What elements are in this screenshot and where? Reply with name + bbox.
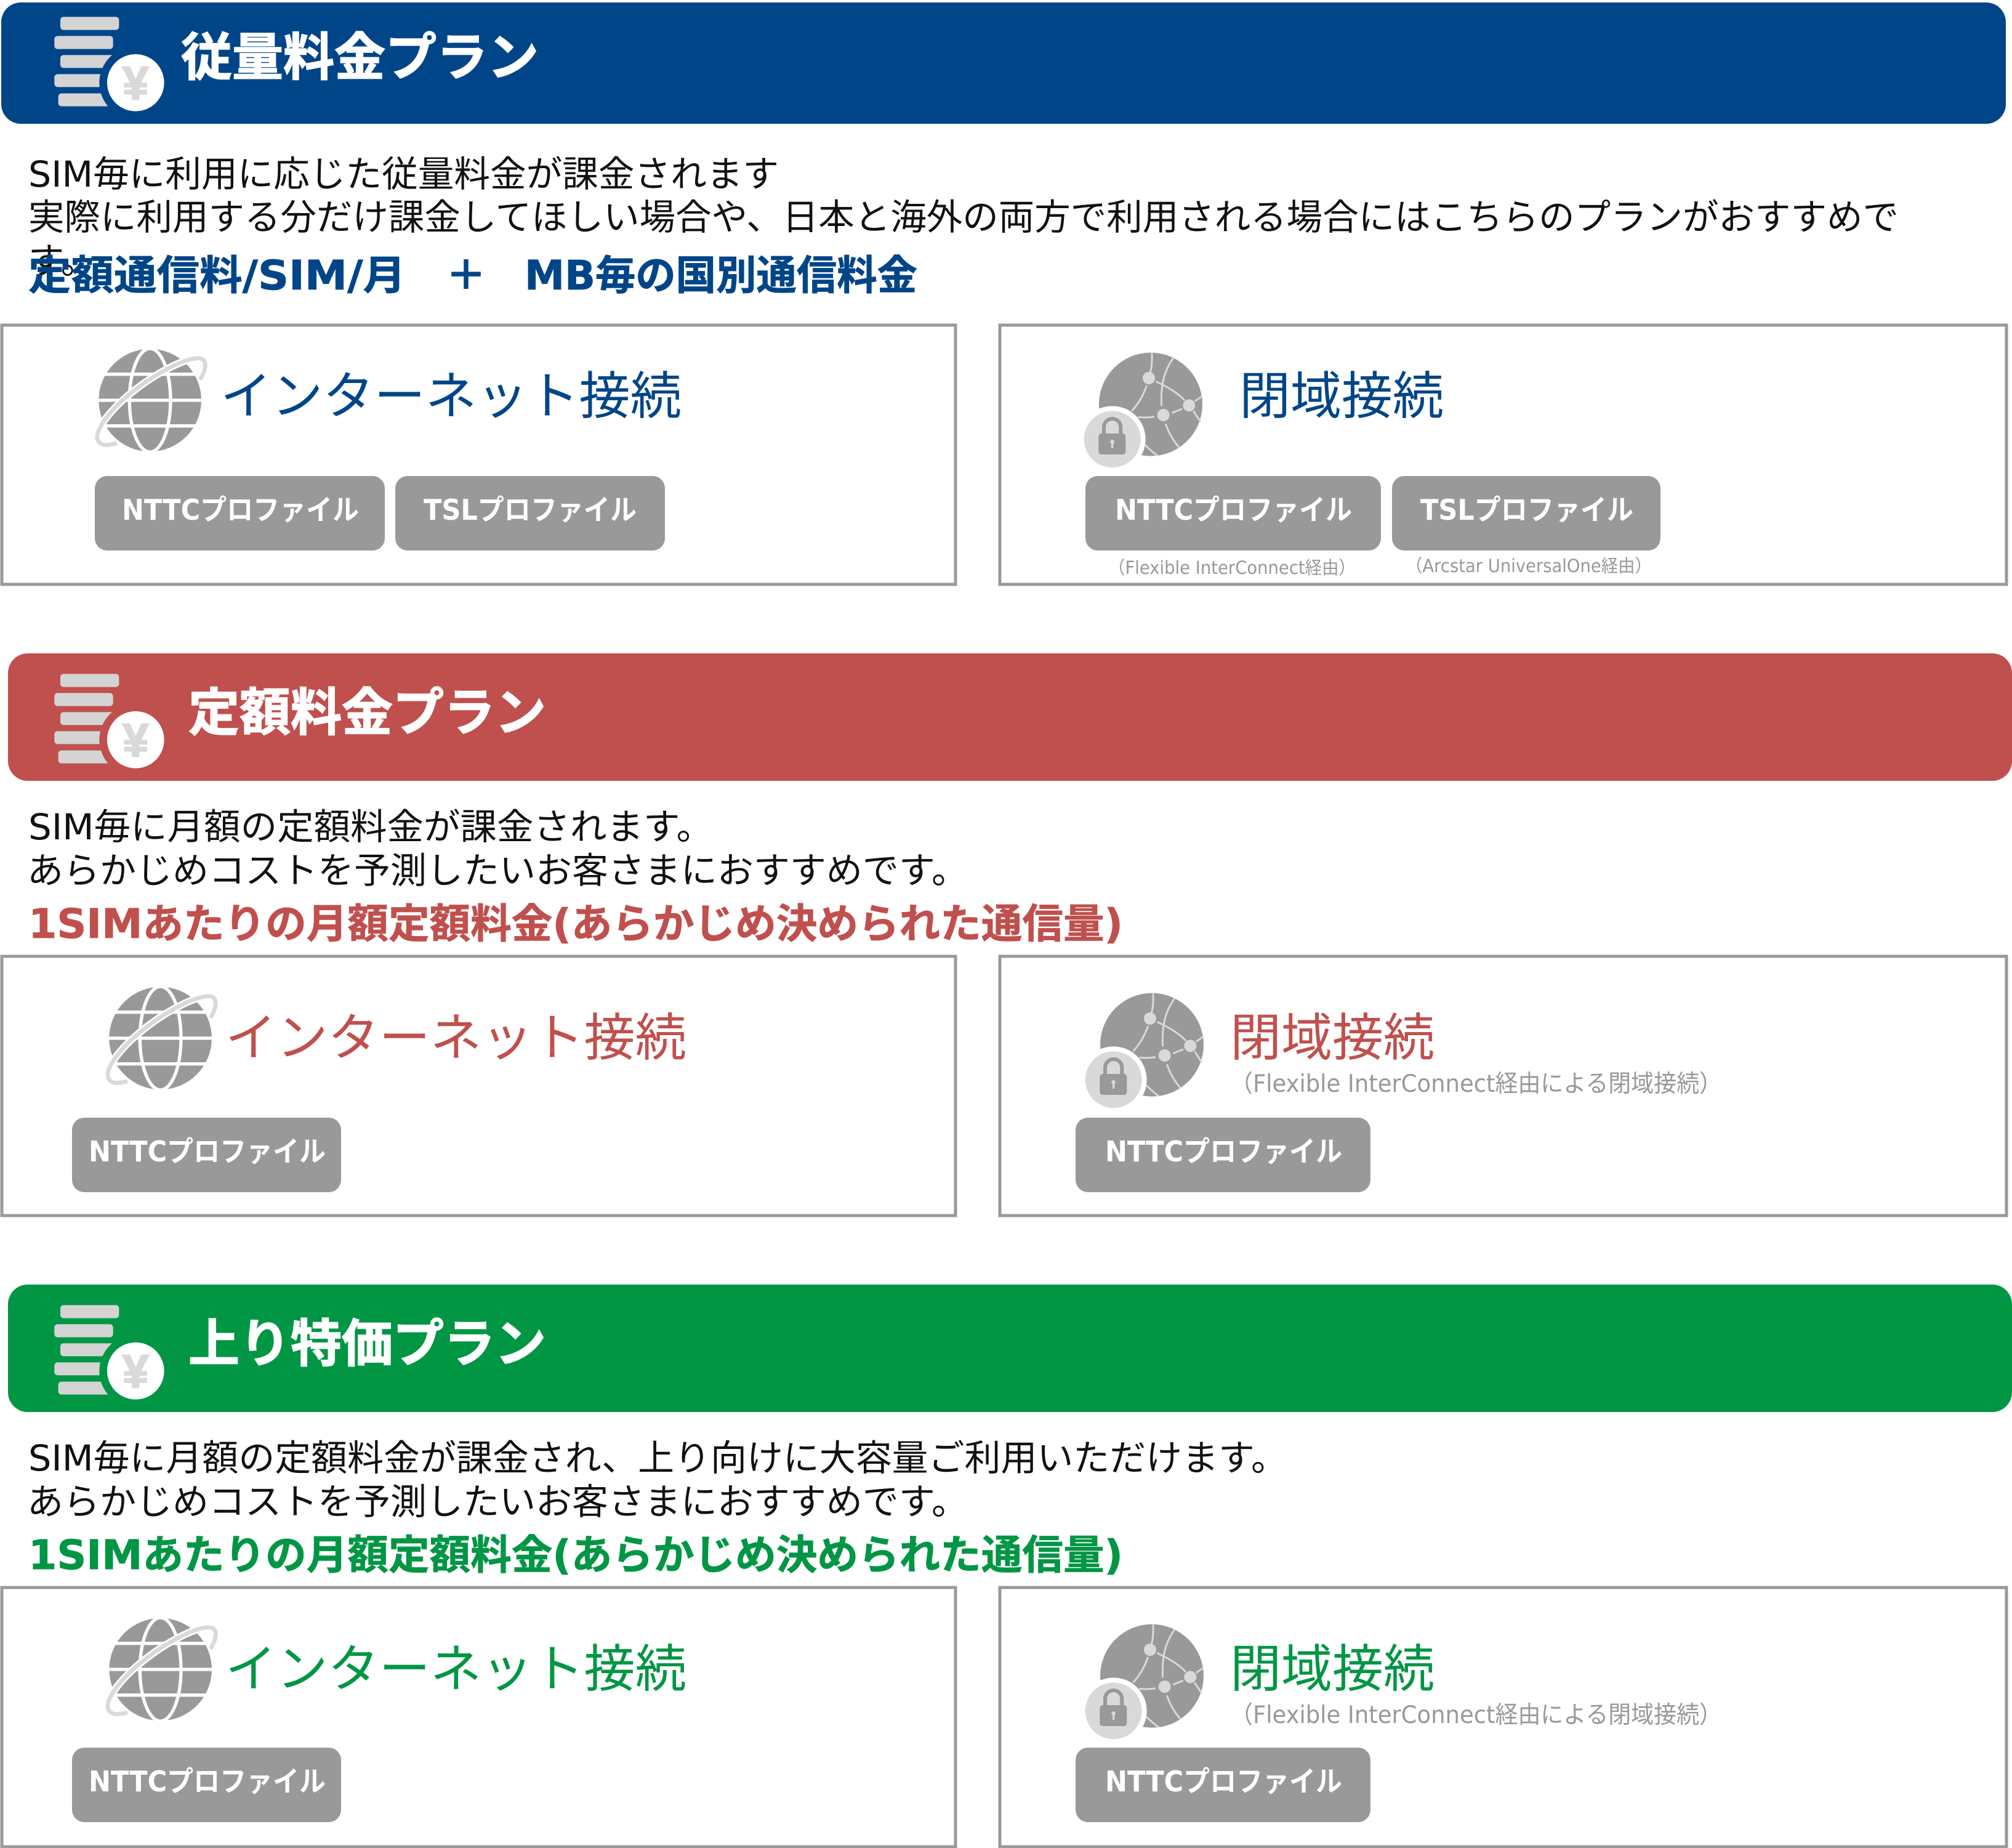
description: flat-rate plan: SIM毎に月額の定額料金が課金されます。: [28, 806, 713, 848]
description: metered plan: [28, 153, 1899, 282]
icon: closed network globe with lock: [1079, 353, 1202, 472]
subtitle: via Flexible InterConnect: （Flexible InterConnect経由による閉域接続）: [1230, 1701, 1722, 1729]
icon: coins and yen: [54, 674, 172, 776]
header bar: metered plan: [1, 2, 2006, 124]
description: metered plan: 実際に利用する分だけ課金してほしい場合や、日本と海外の両方で利用される場合にはこちらのプランがおすすめで: [28, 196, 1899, 238]
panel title: internet connection: インターネット接続: [225, 1639, 686, 1699]
badge: NTTC profile: NTTCプロファイル: [1115, 493, 1352, 527]
note: Flexible InterConnect: （Flexible InterConnect経由）: [1108, 557, 1356, 578]
header bar: flat-rate plan: [8, 653, 2012, 781]
badge: NTTC profile: [1085, 476, 1381, 551]
panel: internet connection, metered: [2, 325, 956, 584]
formula: metered plan: ＋: [446, 252, 486, 299]
icon: coins and yen: ¥: [123, 1346, 148, 1398]
panel title: closed connection: 閉域接続: [1239, 366, 1444, 426]
formula: uplink discount plan: 1SIMあたりの月額定額料金(あらかじめ決められた通信量): [28, 1531, 1123, 1579]
icon: coins and yen: [54, 1305, 172, 1407]
icon: globe: [105, 1618, 215, 1721]
panel: closed connection, metered: [1000, 325, 2006, 584]
badge: NTTC profile: [1076, 1118, 1370, 1192]
badge: TSL profile: [1392, 476, 1660, 551]
heading: metered plan: 従量料金プラン: [181, 28, 539, 87]
icon: coins and yen: [54, 17, 172, 119]
panel: internet connection, flat-rate: [2, 956, 956, 1216]
icon: coins and yen: ¥: [123, 715, 148, 767]
description: uplink discount plan: あらかじめコストを予測したいお客さまにおすすめです。: [27, 1481, 968, 1523]
formula: metered plan: [28, 252, 917, 299]
header bar: uplink discount plan: [8, 1285, 2012, 1412]
panel: internet connection, uplink: [2, 1588, 956, 1847]
formula: metered plan: MB毎の国別通信料金: [525, 252, 917, 299]
icon: coins and yen: ¥: [123, 58, 148, 110]
badge: NTTC profile: [95, 476, 385, 551]
section: metered plan: [1, 2, 2006, 584]
formula: metered plan: 定額通信料/SIM/月: [28, 252, 406, 299]
section: flat-rate plan: [2, 653, 2012, 1216]
badge: TSL profile: TSLプロファイル: [1420, 493, 1633, 527]
icon: globe: [94, 349, 205, 452]
badge: NTTC profile: NTTCプロファイル: [1105, 1765, 1342, 1798]
formula: flat-rate plan: 1SIMあたりの月額定額料金(あらかじめ決められた通信量): [28, 900, 1123, 948]
panel title: closed connection: 閉域接続: [1230, 1008, 1435, 1068]
badge: NTTC profile: NTTCプロファイル: [89, 1765, 326, 1798]
panel title: internet connection: インターネット接続: [220, 366, 682, 426]
section: uplink discount plan: [2, 1285, 2012, 1847]
badge: NTTC profile: [1076, 1748, 1370, 1822]
panel title: closed connection: 閉域接続: [1230, 1639, 1435, 1699]
note: Arcstar UniversalOne: （Arcstar UniversalOne経由）: [1406, 555, 1652, 576]
description: flat-rate plan: [27, 806, 968, 892]
badge: TSL profile: [395, 476, 665, 551]
description: uplink discount plan: SIM毎に月額の定額料金が課金され、上り向けに大容量ご利用いただけます。: [28, 1437, 1287, 1479]
icon: globe: [105, 987, 215, 1090]
description: flat-rate plan: あらかじめコストを予測したいお客さまにおすすめです。: [27, 850, 968, 892]
icon: closed network globe with lock: [1080, 993, 1204, 1113]
description: uplink discount plan: [27, 1437, 1287, 1523]
badge: NTTC profile: [72, 1118, 341, 1192]
icon: closed network globe with lock: [1080, 1624, 1204, 1744]
panel: closed connection, uplink: [1000, 1588, 2006, 1847]
panel title: internet connection: インターネット接続: [225, 1008, 686, 1068]
badge: NTTC profile: [72, 1748, 341, 1822]
subtitle: via Flexible InterConnect: （Flexible InterConnect経由による閉域接続）: [1230, 1070, 1722, 1098]
badge: NTTC profile: NTTCプロファイル: [122, 493, 359, 527]
heading: flat-rate plan: 定額料金プラン: [188, 683, 546, 743]
panel: closed connection, flat-rate: [1000, 956, 2006, 1216]
badge: NTTC profile: NTTCプロファイル: [89, 1135, 326, 1168]
badge: TSL profile: TSLプロファイル: [424, 493, 637, 527]
badge: NTTC profile: NTTCプロファイル: [1105, 1135, 1342, 1168]
description: metered plan: す。: [28, 240, 97, 282]
description: metered plan: SIM毎に利用に応じた従量料金が課金されます: [28, 153, 779, 195]
heading: uplink discount plan: 上り特価プラン: [188, 1314, 546, 1374]
